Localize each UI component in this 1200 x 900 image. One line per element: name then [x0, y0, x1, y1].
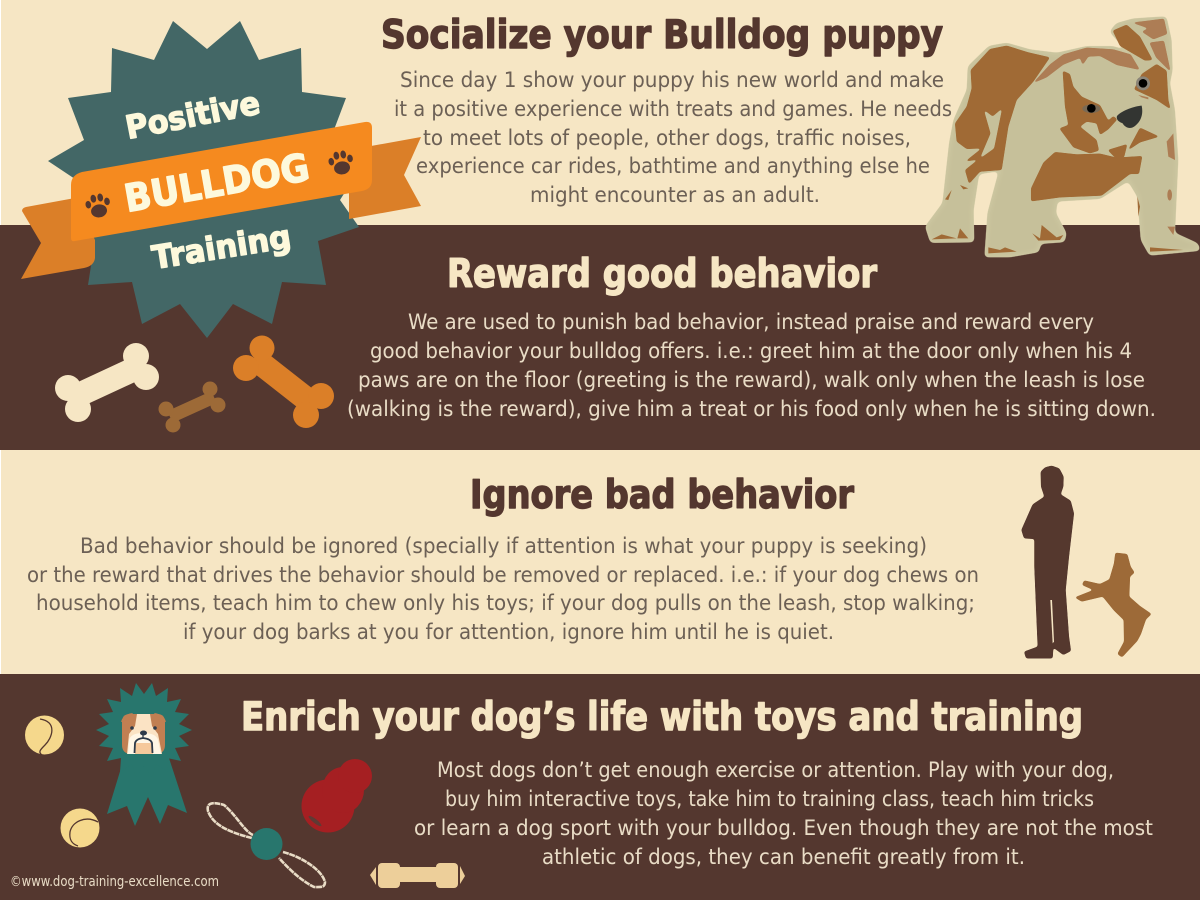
- icon: cream bone: [55, 343, 159, 422]
- nose: [1117, 106, 1142, 128]
- text block: socialize: [394, 68, 952, 207]
- eyes: [1082, 104, 1100, 113]
- text block: enrich: [414, 758, 1153, 869]
- footer credit: ©www.dog-training-excellence.com: [10, 874, 219, 890]
- chest patch: [1031, 152, 1142, 201]
- text block: socialize: to meet lots of people, other dogs, traffic noises,: [423, 126, 911, 150]
- eye patch: [1134, 64, 1171, 109]
- dog: [1075, 553, 1152, 657]
- dog body: [926, 17, 1199, 256]
- text block: enrich: athletic of dogs, they can benefit greatly from it.: [542, 845, 1025, 869]
- text block: ignore: or the reward that drives the behavior should be removed or replaced. i.e.: if your dog chews on: [27, 563, 979, 587]
- icon: orange bone: [233, 336, 334, 428]
- ribbon left tail: [21, 198, 95, 279]
- face patch: [1059, 71, 1117, 153]
- text block: ignore: [27, 534, 979, 644]
- icon: left paw: [84, 192, 112, 219]
- ear: [1113, 25, 1153, 61]
- text block: reward: We are used to punish bad behavior, instead praise and reward every: [408, 310, 1094, 334]
- icon: right paw: [327, 149, 355, 176]
- icon: tennis ball top: [25, 716, 64, 755]
- icon: tennis ball bottom: [60, 808, 100, 848]
- text block: socialize: it a positive experience with treats and games. He needs: [394, 97, 952, 121]
- text block: reward: paws are on the floor (greeting is the reward), walk only when the leash is lose: [358, 368, 1145, 392]
- text block: reward: [347, 310, 1156, 421]
- text block: reward: good behavior your bulldog offers. i.e.: greet him at the door only when his 4: [370, 339, 1132, 363]
- heading: Reward good behavior: Reward good behavior: [447, 252, 878, 297]
- icon: man and jumping dog silhouette: [1021, 466, 1152, 658]
- ribbon band: [71, 122, 372, 241]
- bulldog face: [121, 713, 166, 754]
- word: BULLDOG: BULLDOG: [121, 145, 313, 221]
- text block: socialize: experience car rides, bathtime and anything else he: [416, 154, 930, 178]
- heading: Ignore bad behavior: Ignore bad behavior: [470, 473, 855, 518]
- rosette star: [96, 683, 192, 777]
- text block: ignore: Bad behavior should be ignored (specially if attention is what your puppy is seeking): [80, 534, 927, 558]
- text block: enrich: or learn a dog sport with your bulldog. Even though they are not the most: [414, 816, 1153, 840]
- heading: Socialize your Bulldog puppy: Socialize your Bulldog puppy: [381, 13, 943, 58]
- heading: Enrich your dog's life: Enrich your dog’s life with toys and training: [241, 695, 1083, 740]
- rear patch: [955, 46, 1050, 184]
- head stripe: [1033, 48, 1140, 83]
- icon: red kong toy: [302, 759, 372, 832]
- text block: ignore: household items, teach him to chew only his toys; if your dog pulls on the leash, stop walking;: [36, 591, 975, 615]
- icon: bulldog puppy: [926, 17, 1199, 256]
- word: Positive: Positive: [122, 84, 263, 147]
- man: [1021, 466, 1074, 658]
- icon: rawhide bone toy: [370, 863, 465, 888]
- starburst: [48, 21, 362, 338]
- word: Training: Training: [149, 217, 294, 277]
- text block: enrich: Most dogs don’t get enough exercise or attention. Play with your dog,: [437, 758, 1114, 782]
- rosette tail: [107, 755, 187, 826]
- text block: reward: (walking is the reward), give him a treat or his food only when he is sitting down.: [347, 397, 1156, 421]
- text block: socialize: Since day 1 show your puppy his new world and make: [400, 68, 944, 92]
- icon: rope toy: [208, 803, 325, 887]
- text block: enrich: buy him interactive toys, take him to training class, teach him tricks: [445, 787, 1094, 811]
- text block: socialize: might encounter as an adult.: [530, 183, 820, 207]
- text block: ignore: if your dog barks at you for attention, ignore him until he is quiet.: [183, 620, 834, 644]
- ribbon right tail: [349, 137, 421, 219]
- spots and toes: [932, 185, 1183, 253]
- badge: Positive Bulldog Training: [21, 21, 421, 338]
- icon: award rosette: [96, 683, 192, 826]
- icon: small brown bone: [158, 382, 226, 432]
